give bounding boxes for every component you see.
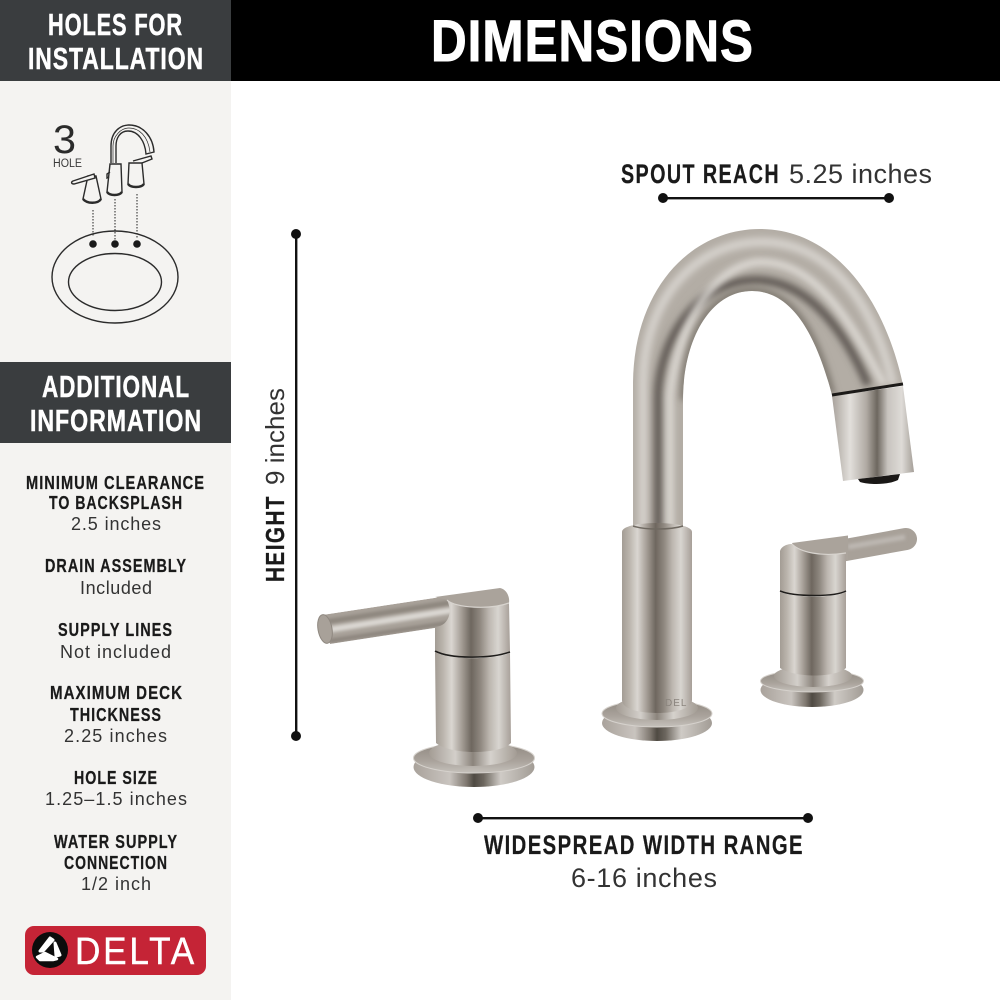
- text: minimum clearance: 2.5 inches: [71, 514, 161, 534]
- label: spout reach: 5.25 inches: [789, 159, 932, 189]
- label: widespread width range: 6-16 inches: [571, 863, 717, 893]
- photo: center column: [602, 523, 712, 741]
- label: height: HEIGHT: [260, 495, 290, 582]
- heading: holes for installation: HOLES FOR: [48, 7, 183, 42]
- text: maximum deck thickness: 2.25 inches: [64, 726, 167, 746]
- text: hole size: 1.25–1.5 inches: [45, 789, 187, 809]
- photo: faucet spout: [633, 229, 903, 530]
- arrow: spout reach dimension line: [658, 193, 894, 203]
- icon: three hole faucet over sink: HOLE: [53, 158, 82, 170]
- label: spout reach: SPOUT REACH: [621, 159, 780, 189]
- photo: center column: DEL: [665, 698, 687, 709]
- text: drain assembly: Included: [80, 578, 152, 598]
- heading: dimensions: DIMENSIONS: [431, 9, 754, 74]
- text: supply lines: SUPPLY LINES: [58, 620, 173, 640]
- text: water supply connection: [54, 832, 178, 894]
- icon: three hole faucet over sink: 3: [53, 118, 76, 162]
- text: maximum deck thickness: [50, 683, 183, 746]
- text: minimum clearance: MINIMUM CLEARANCE: [26, 473, 205, 493]
- text: maximum deck thickness: MAXIMUM DECK: [50, 683, 183, 703]
- logo: delta: [25, 926, 206, 975]
- photo: left handle: [316, 588, 534, 787]
- text: drain assembly: [45, 556, 187, 598]
- heading: additional information: ADDITIONAL: [42, 369, 190, 404]
- text: drain assembly: DRAIN ASSEMBLY: [45, 556, 187, 576]
- text: supply lines: [58, 620, 173, 662]
- text: hole size: HOLE SIZE: [74, 768, 158, 788]
- text: water supply connection: CONNECTION: [64, 853, 168, 873]
- text: hole size: [45, 768, 187, 809]
- logo: delta: DELTA: [75, 931, 197, 973]
- lever: [325, 598, 450, 644]
- photo: faucet nozzle: [832, 384, 914, 484]
- text: supply lines: Not included: [60, 642, 171, 662]
- heading: holes for installation: INSTALLATION: [28, 41, 204, 76]
- arrow: height dimension line: [291, 229, 301, 741]
- text: minimum clearance: TO BACKSPLASH: [49, 493, 183, 513]
- label: spout reach: [621, 159, 932, 189]
- text: water supply connection: WATER SUPPLY: [54, 832, 178, 852]
- arrow: width dimension line: [473, 813, 813, 823]
- heading: additional information: INFORMATION: [30, 403, 202, 438]
- panel: sidebar: [0, 0, 231, 1000]
- text: water supply connection: 1/2 inch: [81, 874, 151, 894]
- label: widespread width range: WIDESPREAD WIDTH RANGE: [484, 830, 804, 860]
- lever: [840, 537, 906, 551]
- label: height: [260, 388, 290, 582]
- heading: additional information: [0, 362, 231, 443]
- photo: right handle: [760, 536, 906, 707]
- text: minimum clearance: [26, 473, 205, 534]
- label: widespread width range: [484, 830, 804, 893]
- icon: three hole faucet over sink: [52, 118, 178, 323]
- heading: holes for installation: [0, 0, 231, 81]
- text: maximum deck thickness: THICKNESS: [70, 705, 162, 725]
- heading: dimensions: [231, 0, 1000, 81]
- label: height: 9 inches: [260, 388, 290, 485]
